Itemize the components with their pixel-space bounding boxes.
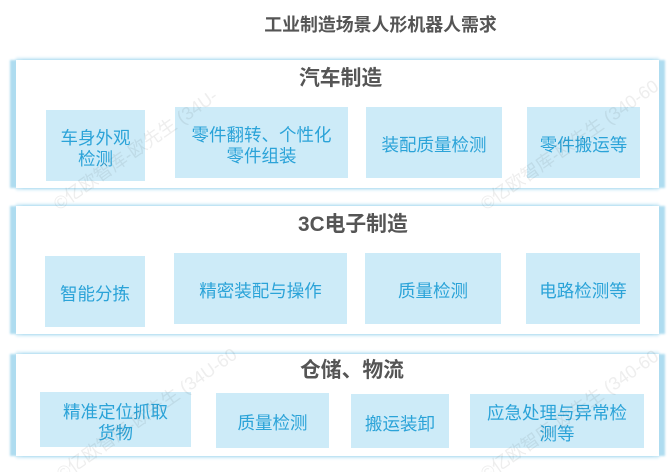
item: body appearance inspection: 检测 [78,148,113,168]
item: body appearance inspection: 车身外观 [60,128,130,148]
panel: warehousing and logistics [16,354,659,456]
item: circuit inspection [526,253,640,324]
item: precise positioning and picking: 货物 [98,422,133,442]
item: smart sorting: 智能分拣 [60,284,130,304]
item: quality inspection [216,393,329,448]
item: handling and unloading: 搬运装卸 [365,414,435,434]
item: smart sorting [45,256,145,327]
item: emergency handling and anomaly detection: 测等 [540,424,574,444]
title: 工业制造场景人形机器人需求 [264,15,497,35]
item: emergency handling and anomaly detection: 应急处理与异常检 [487,403,627,423]
heading: 3C electronics manufacturing: 3C电子制造 [298,213,408,236]
item: quality inspection [365,253,501,324]
item: part flipping and personalized assembly: 零件组装 [226,146,296,166]
item: body appearance inspection [46,110,145,181]
item: part handling: 零件搬运等 [540,135,627,155]
item: precise positioning and picking [40,392,191,447]
item: part flipping and personalized assembly [175,107,348,178]
item: precise positioning and picking: 精准定位抓取 [63,402,168,422]
item: assembly quality inspection [366,107,502,178]
item: handling and unloading [351,394,449,448]
item: quality inspection: 质量检测 [238,413,308,433]
item: quality inspection: 质量检测 [398,281,468,301]
panel: automotive manufacturing [16,60,659,188]
watermark: left: ©亿欧智库-欧先生 (34U- [50,86,221,214]
item: precision assembly and operation [174,253,347,324]
item: circuit inspection: 电路检测等 [539,281,627,301]
panel: 3C electronics manufacturing [16,206,659,334]
item: emergency handling and anomaly detection [470,394,644,448]
heading: warehousing and logistics: 仓储、物流 [300,359,404,382]
item: assembly quality inspection: 装配质量检测 [382,135,486,155]
watermark: right: ©亿欧智库-欧先生 (340-60 [477,76,662,214]
item: part handling [527,107,640,178]
item: part flipping and personalized assembly: 零件翻转、个性化 [192,124,332,144]
item: precision assembly and operation: 精密装配与操作 [199,281,322,301]
heading: automotive manufacturing: 汽车制造 [299,67,382,90]
